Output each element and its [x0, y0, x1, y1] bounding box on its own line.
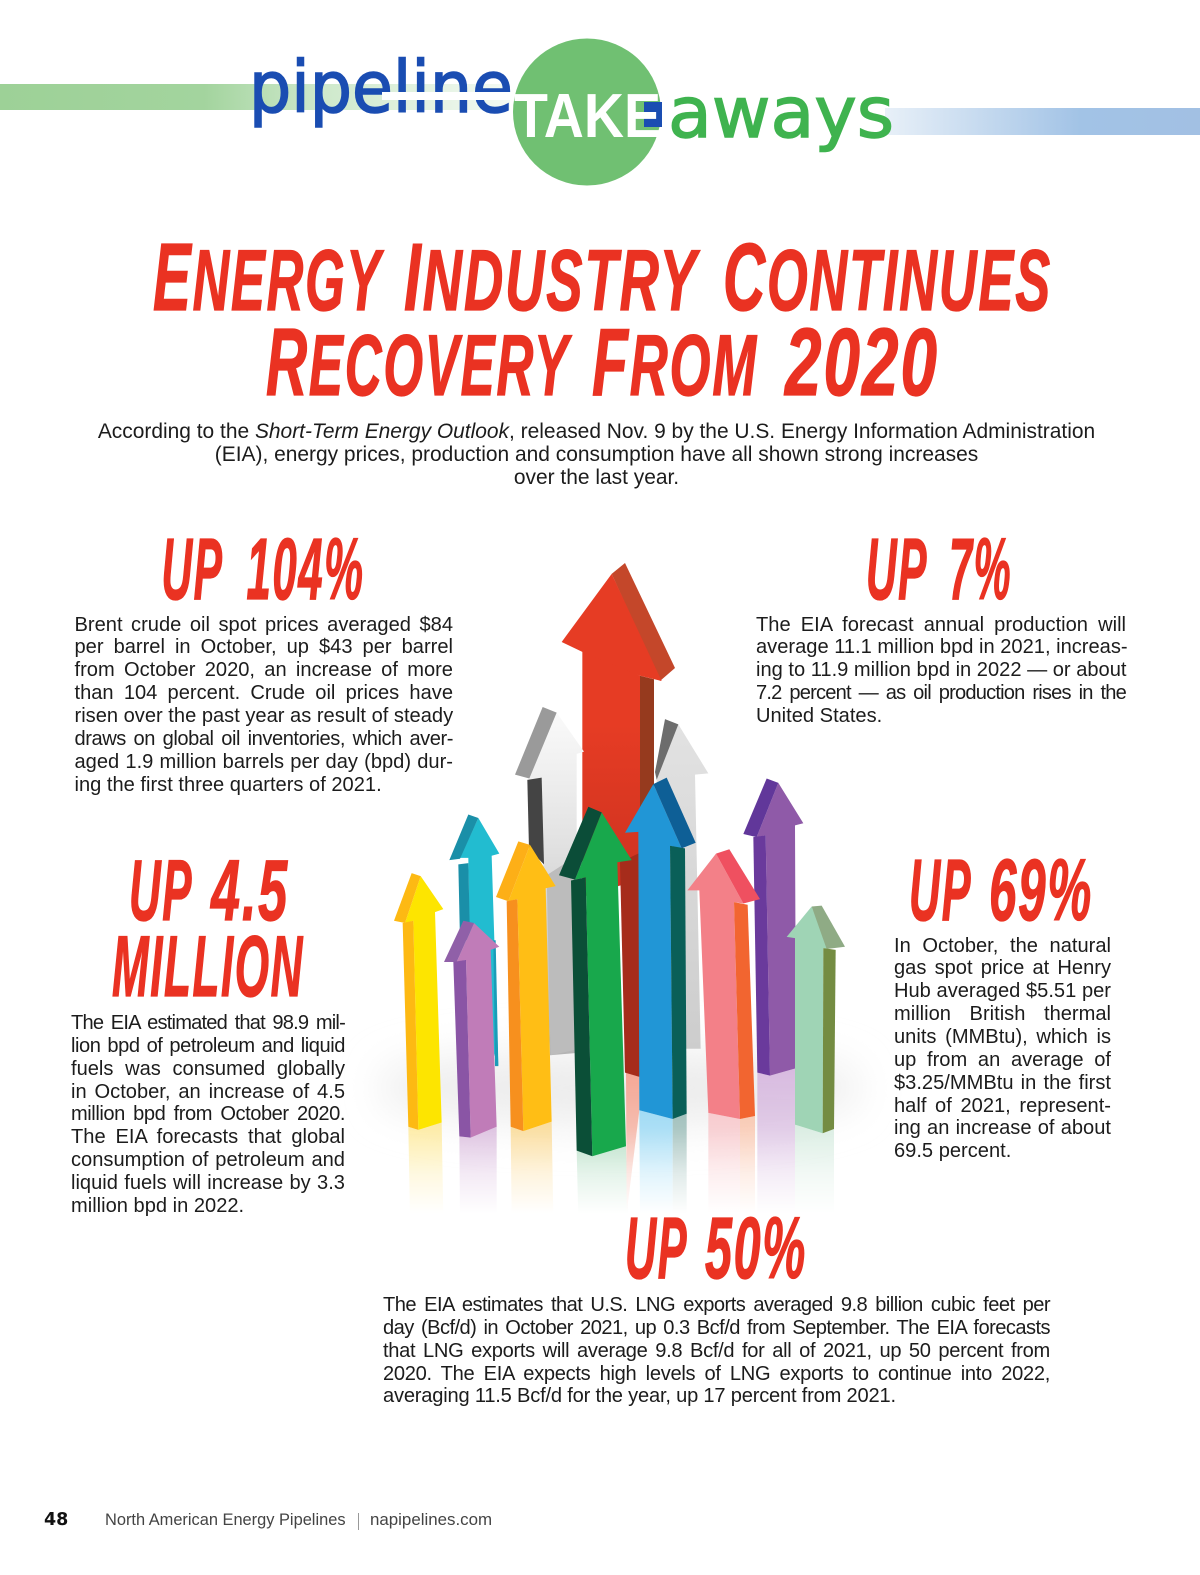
text: natural gas: Hub averaged $5.51 per: [894, 980, 1111, 1002]
title: 2020: [784, 309, 939, 416]
text: consumption: in October, an increase of 4.5: [71, 1081, 345, 1103]
footer: page number and publication: [44, 1510, 492, 1530]
text: consumption: [71, 1012, 345, 1217]
text: lng exports: The EIA estimates that U.S. LNG exports averaged 9.8 billion cubic feet per: [383, 1294, 1050, 1316]
header logo: pipeline takeaways: aways: [668, 72, 894, 154]
text: consumption: million bpd from October 2020.: [71, 1103, 345, 1125]
heading: up 7%: UP: [866, 521, 928, 618]
intro text: (EIA), energy prices, production and consumption have all shown strong increases: [215, 443, 978, 466]
text: lng exports: [383, 1294, 1050, 1407]
heading: up 69%: UP: [909, 842, 972, 939]
arrow reflections: [408, 1068, 834, 1218]
heading: up 4.5 million: [112, 843, 304, 1015]
text: brent crude: than 104 percent. Crude oil prices have: [74, 682, 453, 704]
text: production: 7.2 percent — as oil production rises in the: [756, 682, 1126, 704]
title: INDUSTRY: [404, 224, 700, 331]
arrow: white right: [653, 719, 708, 1049]
text: natural gas: gas spot price at Henry: [894, 957, 1111, 979]
text: natural gas: In October, the natural: [894, 935, 1111, 957]
text: production: The EIA forecast annual production will: [756, 614, 1126, 636]
text: consumption: liquid fuels will increase by 3.3: [71, 1172, 345, 1194]
text: natural gas: half of 2021, represent-: [894, 1094, 1111, 1116]
text: production: United States.: [756, 705, 882, 727]
text: consumption: lion bpd of petroleum and liquid: [71, 1035, 345, 1057]
text: production: [756, 614, 1128, 727]
panel: up 69 percent: [894, 842, 1111, 1162]
text: brent crude: from October 2020, an increase of more: [74, 659, 453, 681]
heading: up 7%: 7%: [949, 521, 1012, 618]
heading: up 4.5 million: MILLION: [112, 919, 304, 1015]
arrow: dark purple: [743, 779, 803, 1076]
text: natural gas: 69.5 percent.: [894, 1140, 1011, 1162]
arrow: orange: [496, 841, 556, 1131]
illustration: rising colored arrows: [394, 563, 846, 1204]
text: brent crude: [74, 614, 454, 796]
heading: up 104%: UP: [161, 521, 223, 618]
text: consumption: consumption of petroleum and: [71, 1149, 345, 1171]
text: brent crude: per barrel in October, up $43 per barrel: [74, 636, 453, 658]
text: brent crude: draws on global oil inventories, which aver-: [74, 728, 453, 750]
heading: up 69%: [909, 842, 1093, 939]
arrow: mint: [787, 906, 845, 1133]
panel: up 104 percent: [74, 521, 454, 796]
text: natural gas: [894, 935, 1111, 1162]
heading: up 104%: [161, 521, 364, 618]
arrow: pink: [687, 849, 760, 1119]
heading: up 104%: 104%: [246, 521, 364, 618]
heading: up 4.5 million: 4.5: [210, 843, 289, 939]
intro text: over the last year.: [514, 466, 679, 489]
text: natural gas: million British thermal: [894, 1003, 1111, 1025]
website: napipelines.com: [370, 1510, 492, 1529]
panel: up 7 percent: [756, 521, 1128, 727]
text: natural gas: ing an increase of about: [894, 1117, 1111, 1139]
title: ENERGY: [153, 224, 384, 331]
header logo: pipeline takeaways: TAKE: [514, 82, 661, 151]
text: lng exports: averaging 11.5 Bcf/d for the year, up 17 percent from 2021.: [383, 1385, 896, 1407]
arrow: yellow: [394, 873, 443, 1130]
heading: up 69%: 69%: [989, 842, 1093, 939]
intro text: [98, 420, 1095, 489]
panel: up 4.5 million: [71, 843, 345, 1217]
title: FROM: [592, 309, 758, 416]
text: consumption: million bpd in 2022.: [71, 1195, 244, 1217]
intro text: According to the Short-Term Energy Outlook, released Nov. 9 by the U.S. Energy Information Administration: [98, 420, 1095, 443]
text: natural gas: $3.25/MMBtu in the first: [894, 1072, 1111, 1094]
text: consumption: fuels was consumed globally: [71, 1058, 345, 1080]
text: lng exports: 2020. The EIA expects high levels of LNG exports to continue into 2022,: [383, 1363, 1050, 1385]
arrow: green: [559, 807, 632, 1156]
text: brent crude: risen over the past year as result of steady: [74, 705, 453, 727]
heading: up 4.5 million: UP: [129, 843, 193, 939]
arrow: white left: [515, 707, 584, 1055]
publication name: North American Energy Pipelines: [105, 1511, 346, 1529]
arrow: teal: [449, 815, 499, 1066]
heading: up 50%: UP: [625, 1200, 688, 1297]
page number: 48: [44, 1510, 68, 1530]
arrow: blue: [625, 778, 696, 1119]
text: brent crude: aged 1.9 million barrels per day (bpd) dur-: [74, 751, 453, 773]
header logo: pipeline takeaways: pipeline: [249, 46, 513, 129]
text: brent crude: Brent crude oil spot prices averaged $84: [74, 614, 453, 636]
text: natural gas: units (MMBtu), which is: [894, 1026, 1111, 1048]
text: production: average 11.1 million bpd in 2021, increas-: [756, 636, 1128, 658]
panel: up 50 percent: [383, 1200, 1050, 1407]
heading: up 50%: 50%: [705, 1200, 807, 1297]
text: consumption: The EIA forecasts that global: [71, 1126, 345, 1148]
arrow: light purple: [444, 921, 499, 1138]
text: lng exports: that LNG exports will average 9.8 Bcf/d for all of 2021, up 50 percent from: [383, 1340, 1050, 1362]
text: natural gas: up from an average of: [894, 1049, 1111, 1071]
text: lng exports: day (Bcf/d) in October 2021, up 0.3 Bcf/d from September. The EIA forecasts: [383, 1317, 1050, 1339]
arrow: red: [562, 563, 675, 1077]
text: production: ing to 11.9 million bpd in 2022 — or about: [756, 659, 1126, 681]
title: RECOVERY: [266, 309, 572, 416]
heading: up 50%: [625, 1200, 807, 1297]
floor shadow: [373, 1051, 867, 1125]
header logo: pipeline takeaways: [0, 38, 1200, 186]
text: consumption: The EIA estimated that 98.9 mil-: [71, 1012, 345, 1034]
text: brent crude: ing the first three quarters of 2021.: [74, 774, 382, 796]
title: [153, 224, 1052, 416]
